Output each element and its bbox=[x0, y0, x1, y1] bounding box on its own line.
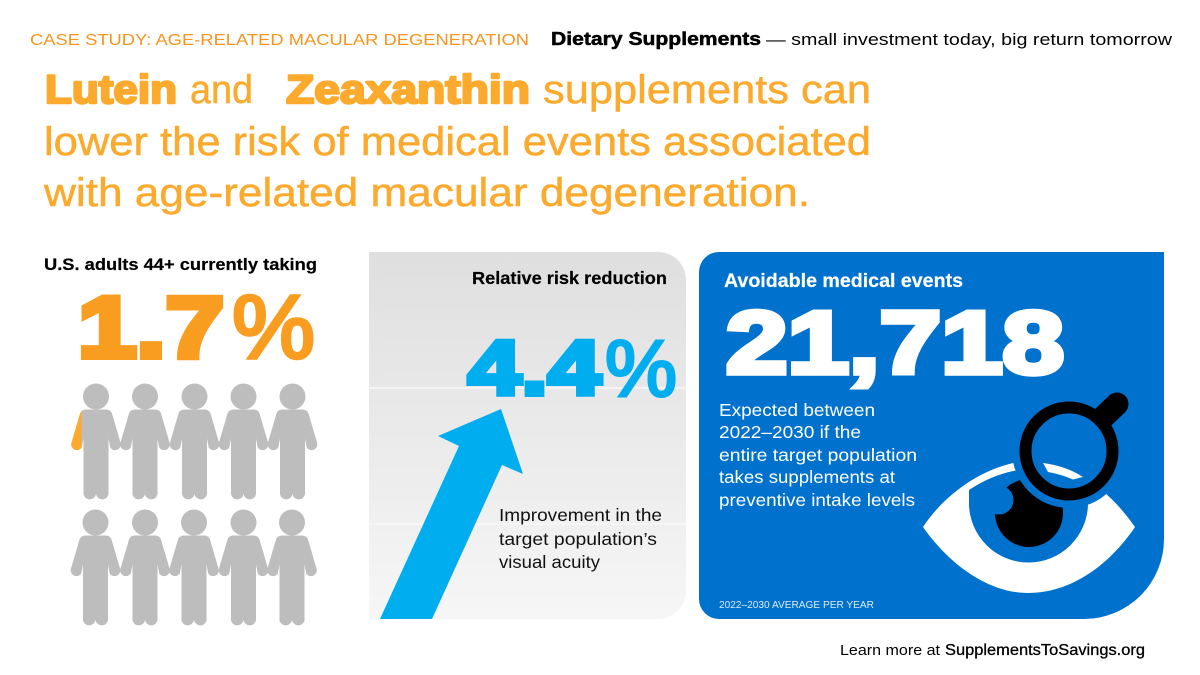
stat: 1.7%: % bbox=[232, 278, 315, 378]
footer: learn more: SupplementsToSavings.org bbox=[945, 642, 1145, 659]
headline: supplements can bbox=[543, 68, 871, 112]
tagline bbox=[551, 29, 1173, 49]
headline: and bbox=[190, 68, 253, 112]
stat: 1.7%: 1.7 bbox=[78, 280, 224, 376]
label: U.S. adults: U.S. adults 44+ currently taking bbox=[44, 255, 317, 274]
headline: lower the risk of medical events associated bbox=[44, 120, 871, 164]
stat: 4.4%: 4.4 bbox=[468, 326, 601, 412]
panel: avoidable medical events bbox=[699, 252, 1164, 619]
footer: learn more bbox=[840, 642, 1145, 659]
headline: with age-related macular degeneration. bbox=[43, 171, 810, 215]
text: expected between bbox=[719, 400, 917, 510]
label: avoidable medical events: Avoidable medical events bbox=[724, 271, 963, 292]
headline bbox=[43, 68, 871, 215]
text: improvement: Improvement in the bbox=[499, 505, 662, 525]
stat: 4.4% bbox=[468, 324, 677, 413]
stat: 1.7% bbox=[78, 278, 315, 378]
text: expected between: entire target population bbox=[719, 445, 917, 465]
text: improvement: target population’s bbox=[499, 529, 657, 549]
footer: learn more: Learn more at bbox=[840, 642, 941, 659]
text: expected between: Expected between bbox=[719, 400, 875, 420]
text: improvement bbox=[499, 505, 662, 572]
tagline: Dietary Supplements bbox=[551, 29, 761, 49]
tagline: — small investment today, big return tomorrow bbox=[766, 30, 1173, 49]
label: relative risk reduction: Relative risk reduction bbox=[472, 268, 667, 288]
headline: Zeaxanthin bbox=[286, 68, 530, 112]
footnote: average per year: 2022–2030 AVERAGE PER YEAR bbox=[719, 599, 874, 611]
panel: current usage bbox=[44, 255, 317, 625]
text: expected between: preventive intake levels bbox=[719, 490, 915, 510]
icon: eye with magnifying glass bbox=[923, 394, 1135, 593]
stat: 4.4%: % bbox=[605, 324, 677, 413]
arrow: upward bbox=[380, 409, 523, 619]
text: expected between: 2022–2030 if the bbox=[719, 422, 861, 442]
text: expected between: takes supplements at bbox=[719, 467, 895, 487]
stat: 21,718: 21,718 bbox=[726, 293, 1064, 392]
pictogram: ten people bbox=[71, 384, 317, 625]
headline: Lutein bbox=[45, 68, 177, 112]
text: improvement: visual acuity bbox=[499, 552, 600, 572]
panel: relative risk reduction bbox=[369, 252, 686, 619]
eyebrow: case study: CASE STUDY: AGE-RELATED MACULAR DEGENERATION bbox=[30, 32, 529, 49]
